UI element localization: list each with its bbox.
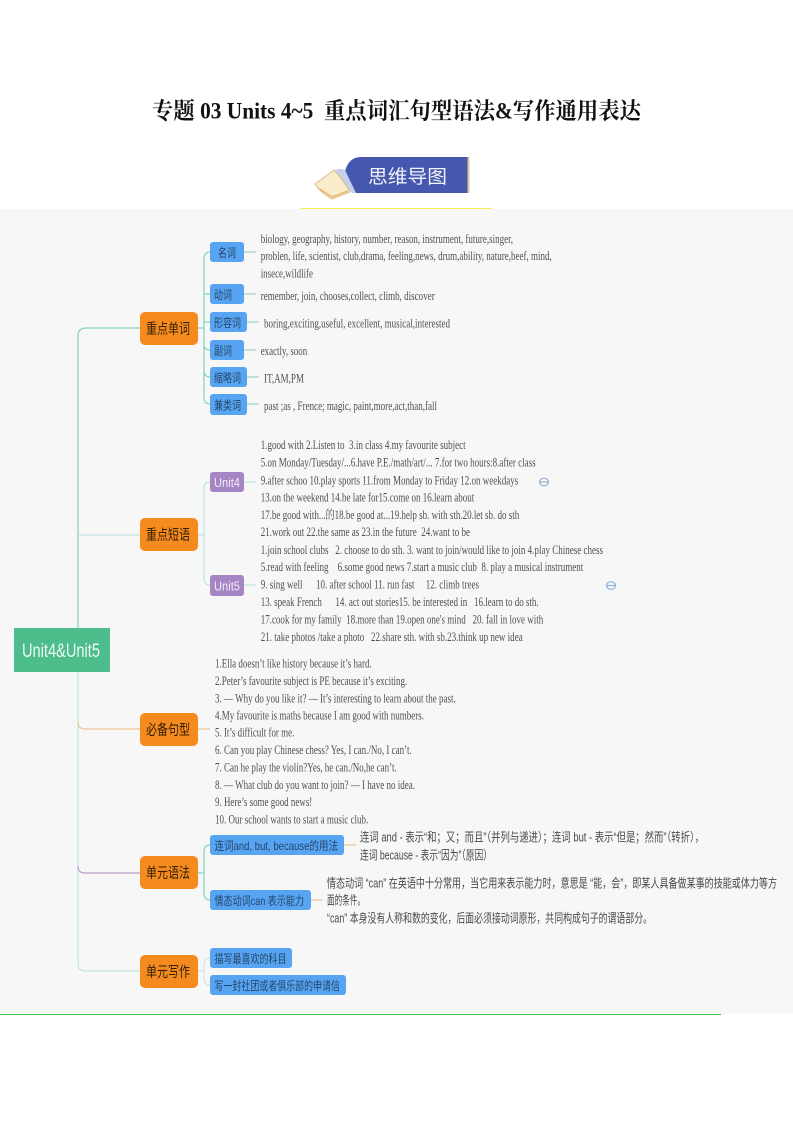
- connectors: [78, 252, 356, 985]
- badge: mind map heading: 思维导图: [368, 166, 447, 188]
- node: Unit5: [210, 575, 244, 596]
- title: 专题 03 Units 4~5 重点词汇句型语法&写作通用表达: [152, 98, 643, 124]
- node: Unit5: Unit5: [214, 578, 240, 594]
- node: 单元写作: [140, 955, 198, 988]
- node: Unit4: [210, 472, 244, 492]
- text: sentences: 8. — What club do you want to join? — I have no idea.: [215, 778, 415, 792]
- node: modal can: 情态动词can 表示能力: [214, 894, 304, 908]
- node: modal can: [210, 890, 311, 910]
- node: 缩略词: [210, 367, 247, 387]
- icon: Unit4 link: [540, 478, 548, 486]
- text: conjunction usage: 连词 because - 表示“因为”（原因）: [360, 848, 492, 862]
- text: sentences: 3. — Why do you like it? — It’s interesting to learn about the past.: [215, 691, 456, 705]
- text: Unit4 phrases: 21.work out 22.the same as 23.in the future 24.want to be: [261, 525, 470, 539]
- text: sentences: 6. Can you play Chinese chess? Yes, I can./No, I can’t.: [215, 743, 412, 757]
- text: nouns: problen, life, scientist, club,drama, feeling,news, drum,ability, nature,beef, mind,: [261, 249, 552, 263]
- text: sentences: 7. Can he play the violin?Yes, he can./No,he can’t.: [215, 760, 397, 774]
- node: 单元写作: 单元写作: [146, 964, 190, 981]
- text: modal can usage: “can” 本身没有人称和数的变化，后面必须接动词原形，共同构成句子的谓语部分。: [327, 910, 652, 926]
- node: club application letter: 写一封社团或者俱乐部的申请信: [214, 978, 340, 993]
- node: 形容词: 形容词: [214, 315, 241, 330]
- branch: key vocabulary: [140, 232, 552, 415]
- text: Unit4 phrases: 17.be good with...的18.be good at...19.help sb. with sth.20.let sb. do sth: [261, 508, 520, 522]
- text: Unit5 phrases: 17.cook for my family 18.more than 19.open one's mind 20. fall in love with: [261, 612, 544, 626]
- yellow divider under badge: [300, 208, 492, 209]
- text: sentences: 9. Here’s some good news!: [215, 795, 312, 809]
- node: Unit4: Unit4: [214, 475, 240, 490]
- text: nouns: biology, geography, history, number, reason, instrument, future,singer,: [261, 232, 513, 246]
- node: 副词: 副词: [214, 344, 232, 358]
- branch: key sentences: [140, 656, 456, 827]
- node: 重点短语: 重点短语: [146, 527, 190, 544]
- node: 必备句型: [140, 713, 198, 746]
- node: club application letter: [210, 975, 346, 995]
- text: Unit5 phrases: 13. speak French 14. act out stories15. be interested in 16.learn to do sth.: [261, 595, 539, 609]
- text: Unit4 phrases: 9.after schoo 10.play sports 11.from Monday to Friday 12.on weekdays: [261, 474, 518, 488]
- text: nouns: insece,wildlife: [261, 266, 313, 280]
- node: 形容词: [210, 312, 247, 332]
- node: favourite subject: [210, 948, 292, 968]
- node: 必备句型: 必备句型: [146, 722, 190, 739]
- text: adjectives: boring,exciting,useful, excellent, musical,interested: [264, 316, 451, 330]
- node: 重点单词: [140, 312, 198, 345]
- branch: key phrases: [140, 438, 616, 644]
- text: sentences: 5. It’s difficult for me.: [215, 726, 294, 740]
- badge: mind map heading: [315, 157, 470, 199]
- text: Unit4 phrases: [261, 438, 536, 539]
- node: 动词: [210, 284, 244, 304]
- text: sentences: 10. Our school wants to start a music club.: [215, 813, 368, 827]
- node: 动词: 动词: [214, 288, 232, 302]
- root node: Unit4&Unit5: [22, 641, 100, 662]
- node: 兼类词: 兼类词: [214, 398, 241, 412]
- text: multi-class words: past ;as , Frence; magic, paint,more,act,than,fall: [264, 399, 437, 413]
- mind map panel background: [0, 209, 793, 1014]
- text: Unit4 phrases: 5.on Monday/Tuesday/...6.have P.E./math/art/... 7.for two hours:8.after class: [261, 456, 536, 470]
- green bottom rule: [0, 1014, 721, 1015]
- node: favourite subject: 描写最喜欢的科目: [214, 951, 286, 966]
- icon: open book: [315, 169, 356, 199]
- text: Unit5 phrases: 21. take photos /take a photo 22.share sth. with sb.23.think up new idea: [261, 630, 523, 644]
- node: 名词: 名词: [218, 245, 236, 260]
- node: 缩略词: 缩略词: [214, 370, 241, 385]
- text: Unit5 phrases: 9. sing well 10. after school 11. run fast 12. climb trees: [261, 578, 479, 592]
- node: conjunctions: [210, 835, 344, 855]
- node: 副词: [210, 340, 244, 360]
- branch: unit grammar: [140, 830, 777, 926]
- text: modal can usage: [327, 876, 777, 926]
- root node: [14, 628, 110, 672]
- text: Unit4 phrases: 1.good with 2.Listen to 3.in class 4.my favourite subject: [261, 438, 466, 452]
- text: nouns: [261, 232, 552, 280]
- text: Unit5 phrases: 1.join school clubs 2. choose to do sth. 3. want to join/would like to join 4.play Chinese chess: [261, 543, 603, 557]
- text: Unit5 phrases: 5.read with feeling 6.some good news 7.start a music club 8. play a musical instrument: [261, 560, 584, 574]
- branch: unit writing: [140, 948, 346, 995]
- text: Unit4 phrases: 13.on the weekend 14.be late for15.come on 16.learn about: [261, 490, 475, 504]
- text: sentences: [215, 656, 456, 827]
- text: Unit5 phrases: [261, 543, 603, 644]
- text: sentences: 2.Peter’s favourite subject is PE because it’s exciting.: [215, 674, 407, 688]
- node: 重点短语: [140, 518, 198, 551]
- node: 单元语法: [140, 856, 198, 889]
- text: abbreviations: IT,AM,PM: [264, 372, 304, 386]
- node: 兼类词: [210, 394, 247, 415]
- node: conjunctions: 连词and, but, because的用法: [214, 838, 338, 853]
- node: 名词: [210, 242, 244, 262]
- node: 单元语法: 单元语法: [146, 865, 190, 882]
- node: 重点单词: 重点单词: [146, 321, 190, 338]
- text: sentences: 1.Ella doesn’t like history because it’s hard.: [215, 656, 372, 670]
- text: modal can usage: 面的条件。: [327, 892, 365, 908]
- text: adverbs: exactly, soon: [261, 344, 308, 358]
- icon: Unit5 link: [606, 582, 616, 589]
- text: conjunction usage: [360, 830, 704, 862]
- text: verbs: remember, join, chooses,collect, climb, discover: [261, 289, 435, 303]
- text: sentences: 4.My favourite is maths because I am good with numbers.: [215, 709, 424, 723]
